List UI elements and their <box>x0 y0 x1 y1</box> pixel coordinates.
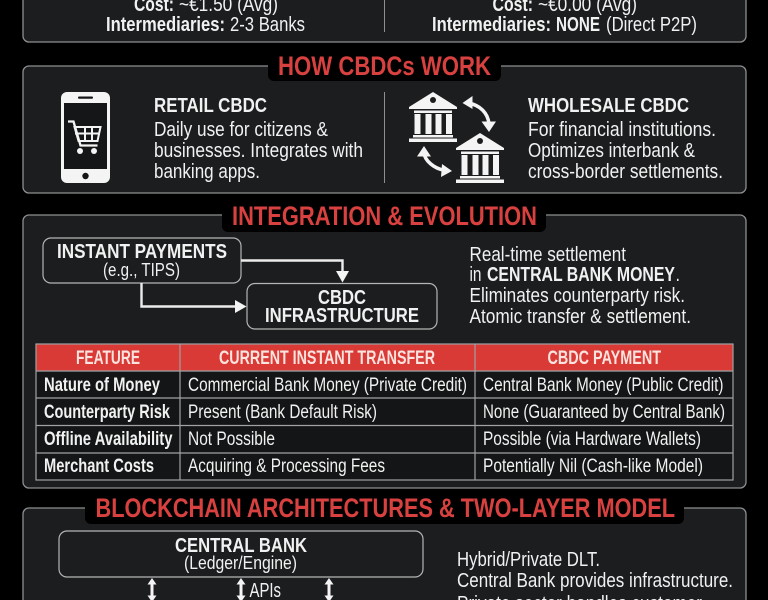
text: retail CBDC <box>154 95 363 183</box>
text: two-layer description: Hybrid/Private DLT. <box>457 549 600 571</box>
text: wholesale CBDC: cross-border settlements. <box>528 161 723 183</box>
text: settlement description: Real-time settlement <box>470 244 626 266</box>
table row: merchant costs: Merchant Costs <box>44 456 154 477</box>
table row: offline availability: Possible (via Hardware Wallets) <box>483 429 701 450</box>
arrows: API links <box>148 578 334 600</box>
table row: counterparty risk <box>44 402 725 423</box>
panel: blockchain architectures (cropped) <box>23 492 746 600</box>
icon: two banks exchanging <box>409 92 504 183</box>
box: central bank: CENTRAL BANK <box>175 535 307 557</box>
panel: integration and evolution <box>23 199 746 488</box>
text: settlement description: in <box>470 264 482 286</box>
arrow: instant payments down to infrastructure <box>241 260 349 282</box>
table row: counterparty risk: Counterparty Risk <box>44 402 170 423</box>
text: wholesale CBDC <box>528 95 723 183</box>
table row: offline availability <box>44 429 701 450</box>
box: CBDC infrastructure: INFRASTRUCTURE <box>265 305 419 327</box>
table row: merchant costs: Potentially Nil (Cash-like Model) <box>483 456 703 477</box>
box: central bank <box>59 531 423 577</box>
table row: nature of money: Commercial Bank Money (Private Credit) <box>188 375 467 396</box>
text: settlement description: . <box>676 264 680 286</box>
table row: nature of money <box>44 375 724 396</box>
text: settlement description: Eliminates counterparty risk. <box>470 285 685 307</box>
text: current cost and intermediaries <box>106 0 305 36</box>
box: instant payments: (e.g., TIPS) <box>103 260 180 280</box>
text: retail CBDC: banking apps. <box>154 161 260 183</box>
text: settlement description: CENTRAL BANK MONEY <box>487 264 676 286</box>
box: central bank: (Ledger/Engine) <box>184 553 297 573</box>
text: wholesale CBDC: For financial institutions. <box>528 119 716 141</box>
text: retail CBDC: Daily use for citizens & <box>154 119 329 141</box>
table header row: CBDC PAYMENT <box>548 348 661 369</box>
heading: integration and evolution: INTEGRATION & EVOLUTION <box>232 201 537 231</box>
table header row: FEATURE <box>76 348 140 369</box>
text: CBDC cost and intermediaries: (Direct P2P) <box>606 14 697 36</box>
text: CBDC cost and intermediaries: Intermediaries: <box>432 14 551 36</box>
text: CBDC cost and intermediaries: NONE <box>556 14 600 36</box>
text: settlement description <box>470 244 691 328</box>
box: instant payments <box>43 238 241 283</box>
table row: counterparty risk: Present (Bank Default Risk) <box>188 402 377 423</box>
text: current cost and intermediaries: Intermediaries: <box>106 14 225 36</box>
table: instant transfer vs CBDC payment <box>36 344 733 480</box>
table row: offline availability: Not Possible <box>188 429 275 450</box>
heading: how CBDCs work: HOW CBDCs WORK <box>278 51 491 81</box>
box: CBDC infrastructure <box>247 284 437 329</box>
text: settlement description: Atomic transfer & settlement. <box>470 306 691 328</box>
table header row: CURRENT INSTANT TRANSFER <box>219 348 435 369</box>
box: CBDC infrastructure: CBDC <box>318 287 366 309</box>
text: two-layer description <box>457 549 733 600</box>
table header row <box>36 344 733 371</box>
text: wholesale CBDC: Optimizes interbank & <box>528 140 696 162</box>
table row: merchant costs <box>44 456 703 477</box>
text: current cost and intermediaries: 2-3 Banks <box>230 14 305 36</box>
text: wholesale CBDC: WHOLESALE CBDC <box>528 95 689 117</box>
icon: smartphone with shopping cart <box>61 92 110 183</box>
table row: nature of money: Nature of Money <box>44 375 160 396</box>
text: retail CBDC: RETAIL CBDC <box>154 95 267 117</box>
panel: cost comparison (cropped) <box>23 0 746 42</box>
table row: offline availability: Offline Availability <box>44 429 173 450</box>
arrow: instant payments across to infrastructure <box>142 283 246 313</box>
text: retail CBDC: businesses. Integrates with <box>154 140 363 162</box>
box: instant payments: INSTANT PAYMENTS <box>57 241 227 263</box>
panel: how CBDCs work <box>23 50 746 193</box>
table row: merchant costs: Acquiring & Processing Fees <box>188 456 385 477</box>
text: CBDC cost and intermediaries <box>432 0 697 36</box>
